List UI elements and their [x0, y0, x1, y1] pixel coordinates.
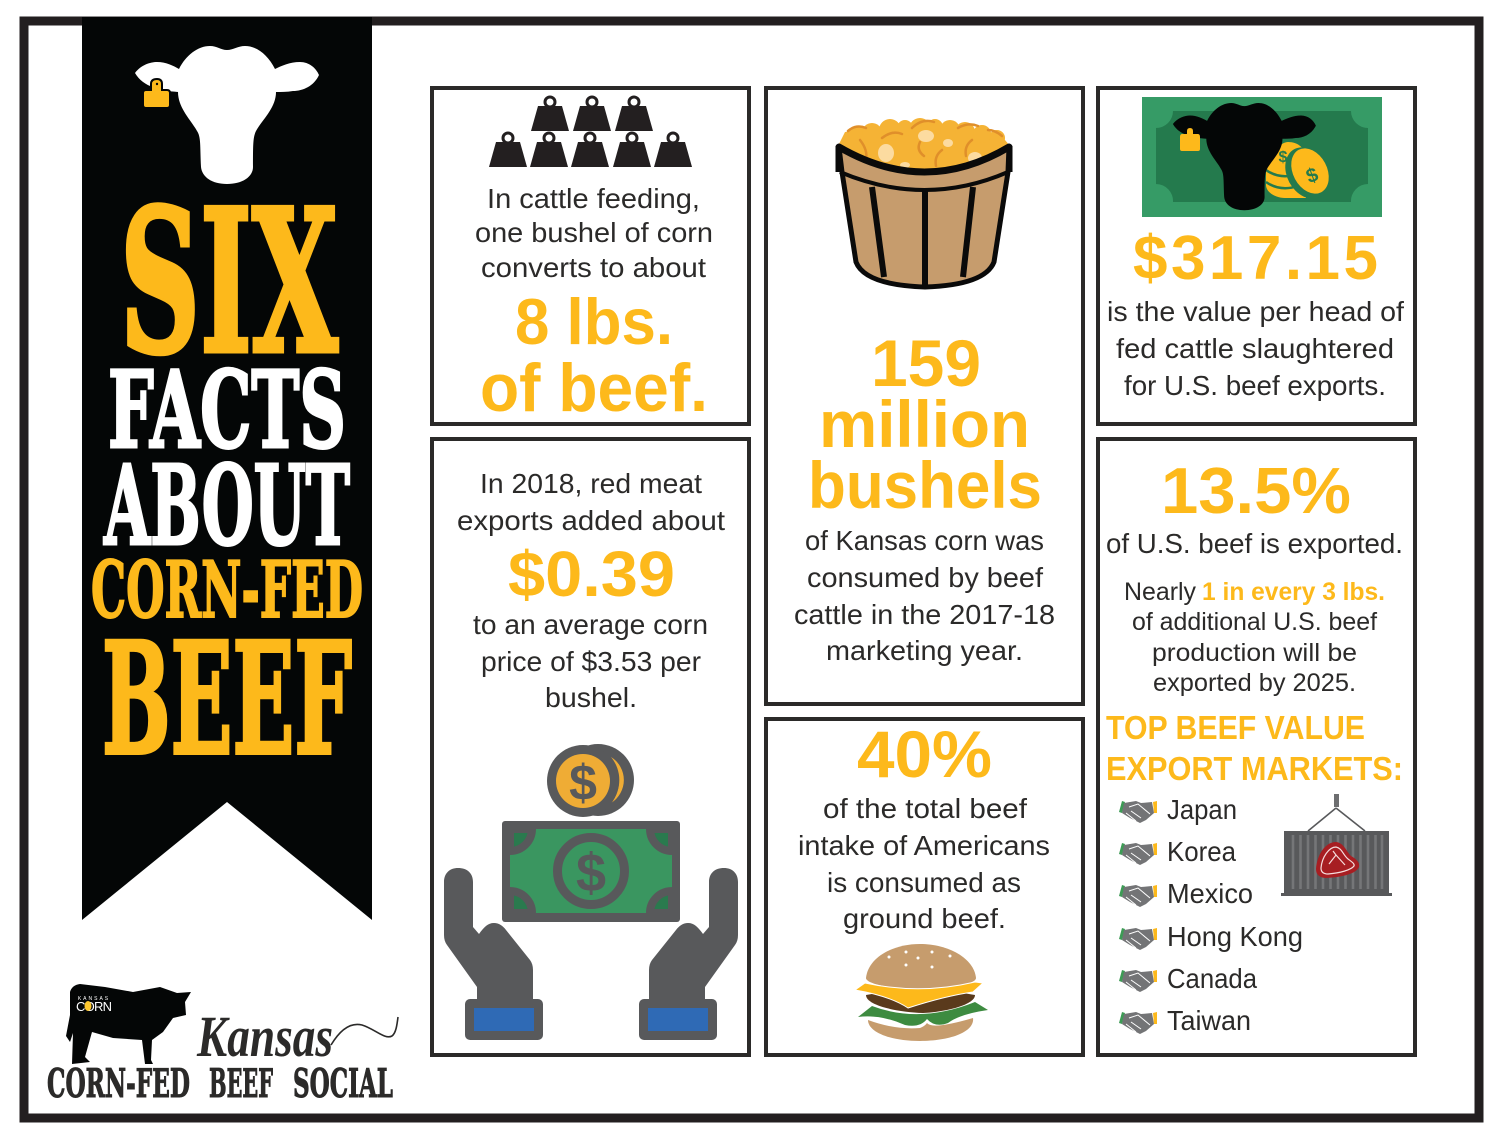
icon: dollar bill with cow and coins: $: [1279, 149, 1288, 166]
stat: 159 million bushels: million: [819, 387, 1030, 461]
icon: dollar bill with cow and coins: [1142, 97, 1382, 217]
text: share exported: of U.S. beef is exported.: [1106, 528, 1403, 559]
market: Korea: Korea: [1167, 836, 1236, 867]
panel: red meat exports: [432, 439, 749, 1055]
text: 1 in every 3 lbs: exported by 2025.: [1153, 669, 1356, 697]
text: 2018 exports: [457, 468, 725, 536]
stat: 8 lbs. of beef: [480, 285, 708, 426]
stat: 40%: 40%: [857, 717, 992, 791]
heading: top beef value export markets: [1106, 709, 1403, 787]
icon: hands holding money: $: [569, 755, 597, 811]
icon: dollar bill with cow and coins: $: [1303, 164, 1321, 188]
market: Korea: [1119, 836, 1236, 867]
list: markets: [1119, 794, 1303, 1036]
logo swash: [331, 1017, 398, 1045]
stat: $317.15: $317.15: [1133, 224, 1378, 293]
text: Kansas corn consumed: [794, 525, 1055, 666]
icon: bull silhouette: [66, 984, 191, 1064]
logo script: Kansas: Kansas: [196, 1004, 333, 1069]
text: corn price: [473, 609, 708, 713]
logo: Kansas Corn-Fed Beef Social: [47, 984, 398, 1107]
text: 2018 exports: In 2018, red meat: [480, 468, 702, 499]
panel: value per head: [1098, 88, 1415, 424]
icon: bull silhouette: CORN: [76, 999, 112, 1014]
logo text: social: SOCIAL: [293, 1061, 393, 1107]
stat: 159 million bushels: [808, 326, 1042, 522]
text: corn price: to an average corn: [473, 609, 708, 640]
icon: bull silhouette: KANSAS: [78, 996, 110, 1002]
icon: hands holding money: [444, 744, 738, 1040]
title: six: SIX: [120, 167, 338, 398]
text: ground beef share: is consumed as: [827, 867, 1021, 898]
text: cattle feeding: converts to about: [481, 252, 706, 283]
panel: bushel converts to beef: [432, 88, 749, 426]
title: corn-fed: CORN-FED: [91, 545, 363, 636]
text: Kansas corn consumed: cattle in the 2017-18: [794, 599, 1055, 630]
market: Mexico: Mexico: [1167, 878, 1253, 909]
text: ground beef share: intake of Americans: [798, 830, 1050, 861]
market: Canada: [1119, 963, 1257, 994]
stat: 8 lbs. of beef: of beef.: [480, 350, 708, 426]
text: 1 in every 3 lbs: Nearly: [1124, 578, 1196, 606]
market: Canada: Canada: [1167, 963, 1257, 994]
icon: cow head with ear tag: [135, 46, 319, 184]
text: 1 in every 3 lbs: [1124, 578, 1385, 697]
panel: Kansas corn consumed: [766, 88, 1083, 704]
icon: hands holding money: $: [576, 843, 606, 903]
logo text: beef: BEEF: [209, 1061, 273, 1107]
text: ground beef share: ground beef.: [843, 903, 1006, 934]
market: Taiwan: [1119, 1005, 1251, 1036]
panel: exports and markets: [1098, 439, 1415, 1055]
market: Japan: [1119, 794, 1237, 825]
text: value per head: is the value per head of: [1107, 296, 1404, 327]
market: Mexico: [1119, 878, 1253, 909]
text: 1 in every 3 lbs: production will be: [1152, 639, 1357, 667]
text: value per head: fed cattle slaughtered: [1116, 333, 1394, 364]
text: 2018 exports: exports added about: [457, 505, 725, 536]
icon: weights: [489, 97, 692, 167]
stat: 159 million bushels: 159: [871, 326, 981, 400]
ribbon banner: [82, 17, 372, 920]
text: Kansas corn consumed: marketing year.: [826, 635, 1023, 666]
market: Taiwan: Taiwan: [1167, 1005, 1251, 1036]
title: about: ABOUT: [103, 441, 350, 570]
text: 1 in every 3 lbs: of additional U.S. beef: [1132, 608, 1377, 636]
text: cattle feeding: [475, 183, 713, 283]
heading: top beef value export markets: EXPORT MARKETS:: [1106, 750, 1403, 787]
market: Hong Kong: Hong Kong: [1167, 921, 1303, 952]
text: cattle feeding: In cattle feeding,: [487, 183, 700, 214]
text: value per head: for U.S. beef exports.: [1124, 370, 1386, 401]
panel: ground beef: [766, 717, 1083, 1055]
stat: 8 lbs. of beef: 8 lbs.: [515, 285, 673, 358]
heading: top beef value export markets: TOP BEEF VALUE: [1106, 709, 1365, 746]
text: corn price: bushel.: [545, 682, 637, 713]
text: ground beef share: [798, 793, 1050, 934]
stat: 13.5%: 13.5%: [1161, 454, 1351, 527]
icon: burger: [855, 944, 988, 1041]
text: 1 in every 3 lbs: 1 in every 3 lbs.: [1202, 578, 1385, 606]
market: Japan: Japan: [1167, 794, 1237, 825]
text: Kansas corn consumed: of Kansas corn was: [805, 525, 1044, 556]
icon: shipping container with steak: [1281, 794, 1392, 896]
text: ground beef share: of the total beef: [823, 793, 1027, 824]
text: value per head: [1107, 296, 1404, 401]
text: corn price: price of $3.53 per: [481, 646, 701, 677]
title: beef: BEEF: [102, 609, 352, 790]
stat: $0.39: $0.39: [508, 538, 675, 610]
stat: 159 million bushels: bushels: [808, 448, 1042, 522]
title: facts: FACTS: [108, 347, 346, 472]
text: cattle feeding: one bushel of corn: [475, 217, 713, 248]
logo text: corn-fed: CORN-FED: [47, 1061, 190, 1107]
text: Kansas corn consumed: consumed by beef: [807, 562, 1043, 593]
icon: bushel basket of corn: [838, 118, 1010, 287]
